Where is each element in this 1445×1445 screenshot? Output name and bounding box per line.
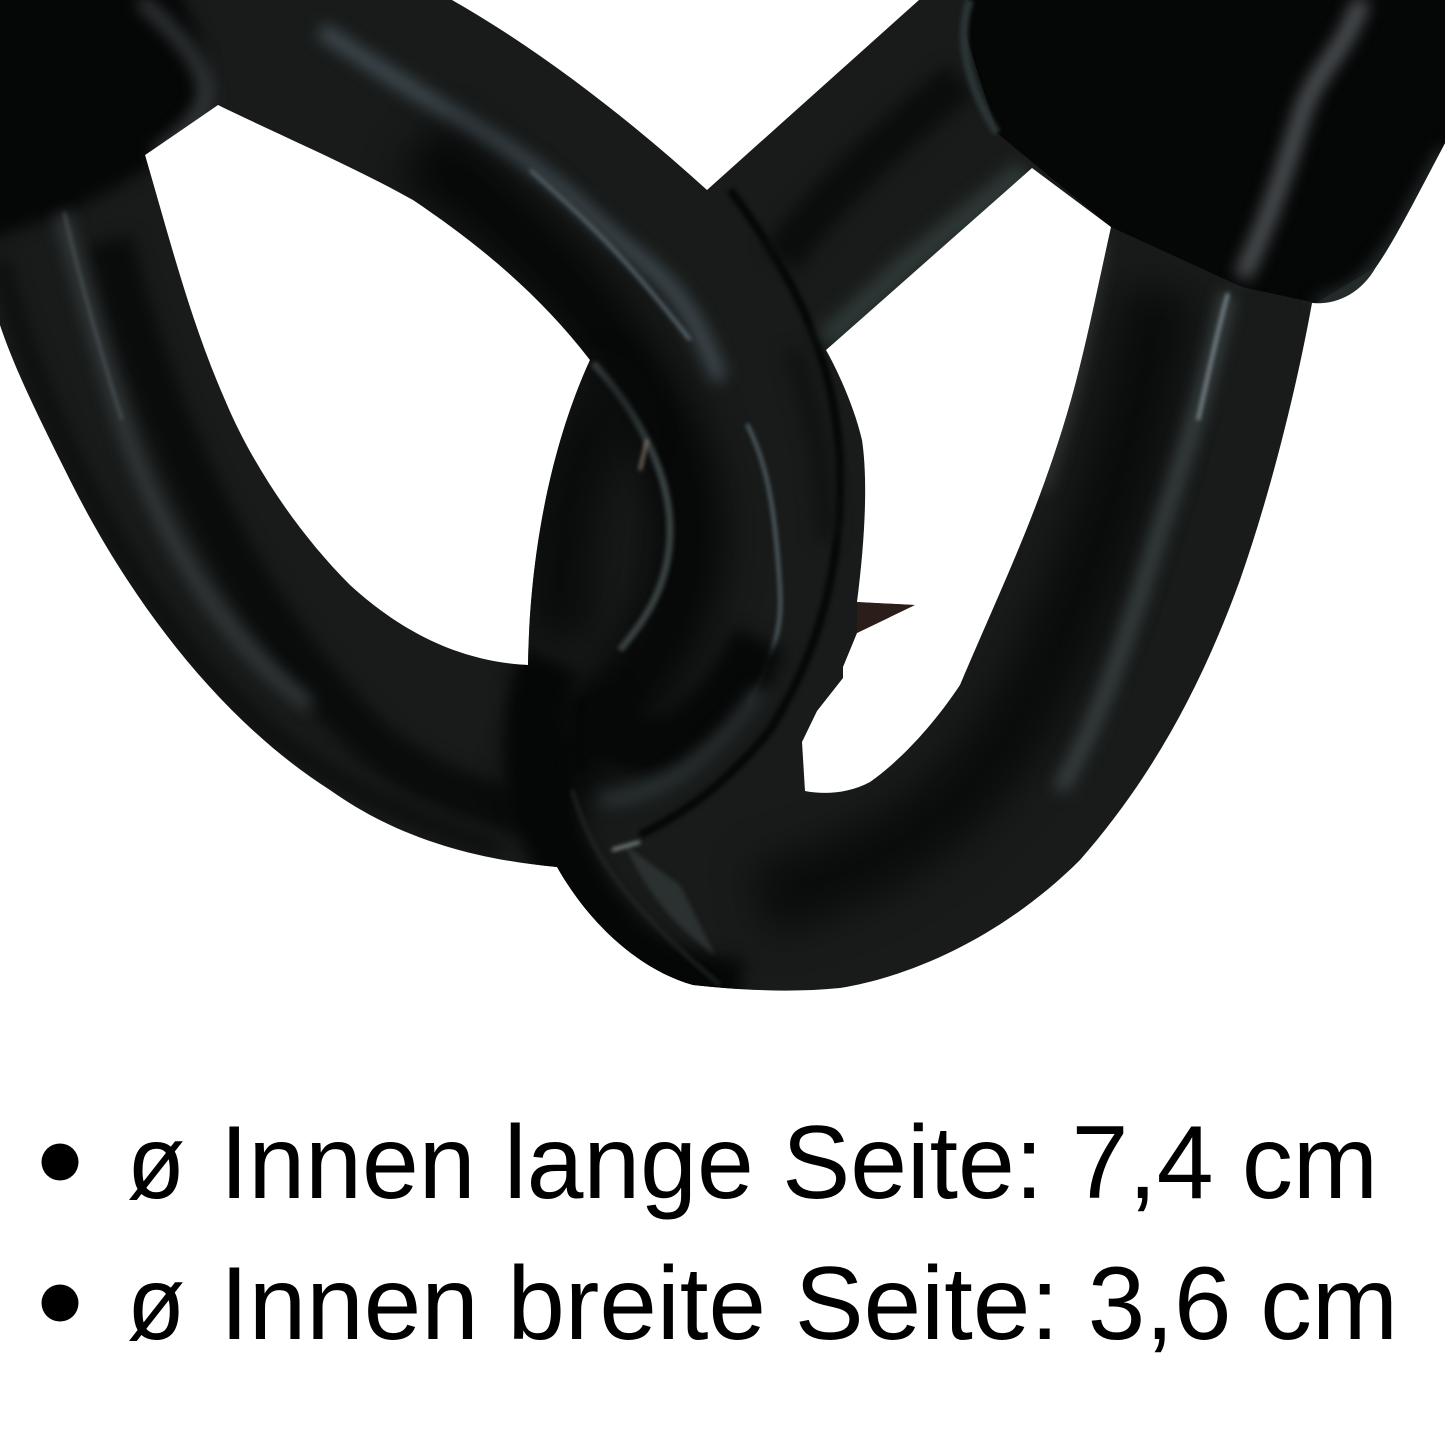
outer loop band [640, 190, 840, 835]
bullet list [42, 1105, 1398, 1362]
left rope shading and highlights [0, 212, 540, 850]
right rope [760, 240, 1228, 900]
lower ring band [534, 660, 740, 990]
upper right rope [780, 80, 1025, 340]
left cap [0, 0, 206, 240]
right cap [964, 0, 1445, 303]
bullet item: long side: Innen lange Seite: 7,4 cm [220, 1105, 1378, 1221]
bullet item: wide side: Innen breite Seite: 3,6 cm [220, 1246, 1398, 1362]
spike shading [857, 602, 915, 633]
bullet item: wide side: ø [127, 1246, 185, 1362]
upper left band highlights [321, 30, 720, 800]
photo: two interlocked black cable loops [0, 0, 1445, 1000]
inner ring [559, 363, 760, 800]
bullet item: long side: ø [127, 1105, 185, 1221]
